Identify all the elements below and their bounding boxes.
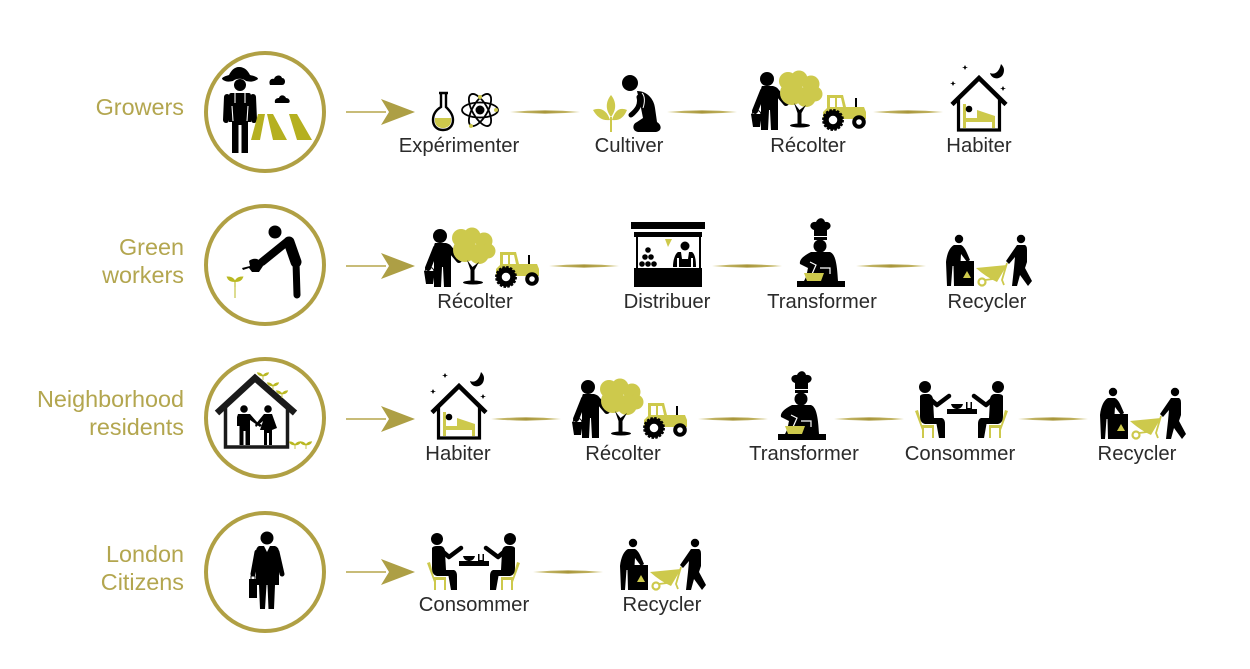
panel: London citizens row: [101, 513, 706, 631]
step: Récolter: Récolter: [770, 135, 846, 157]
step: Cultiver: [593, 75, 664, 157]
connector: [510, 110, 580, 114]
icon: worker watering a sprout in a circle: [206, 206, 324, 324]
step: Transformer: Transformer: [749, 443, 859, 465]
arrow: [346, 99, 415, 125]
step: Expérimenter: Expérimenter: [399, 135, 520, 157]
connector: [856, 264, 926, 268]
connector: [873, 110, 943, 114]
step: Récolter: [572, 378, 687, 465]
icon: couple in a house in a circle: [206, 359, 324, 477]
step: Consommer: [905, 381, 1015, 465]
connector: [533, 570, 603, 574]
step: Consommer: [419, 533, 529, 616]
heading: Neighborhood residents: residents: [89, 414, 184, 440]
step: Recycler: Recycler: [623, 594, 702, 616]
step: Recycler: [620, 539, 706, 616]
connector: [549, 264, 619, 268]
step: Récolter: [751, 70, 866, 157]
heading: Growers: Growers: [96, 94, 184, 120]
step: Habiter: [425, 372, 491, 465]
step: Récolter: Récolter: [437, 291, 513, 313]
connector: [698, 417, 768, 421]
heading: London Citizens: Citizens: [101, 569, 184, 595]
step: Transformer: Transformer: [767, 291, 877, 313]
panel: green workers row: [101, 206, 1032, 324]
step: Distribuer: Distribuer: [624, 291, 711, 313]
icon: businessman with briefcase in a circle: [206, 513, 324, 631]
heading: Green workers: Green: [119, 234, 184, 260]
arrow: [346, 559, 415, 585]
connector: [1018, 417, 1088, 421]
arrow: [346, 253, 415, 279]
step: Habiter: [946, 64, 1012, 157]
step: Recycler: [1098, 388, 1186, 465]
step: Expérimenter: [399, 91, 520, 157]
step: Habiter: Habiter: [425, 443, 491, 465]
connector: [667, 110, 737, 114]
arrow: [346, 406, 415, 432]
step: Recycler: [946, 235, 1032, 313]
heading: Green workers: workers: [101, 262, 184, 288]
step: Consommer: Consommer: [419, 594, 529, 616]
step: Habiter: Habiter: [946, 135, 1012, 157]
step: Recycler: Recycler: [1098, 443, 1177, 465]
connector: [491, 417, 561, 421]
step: Distribuer: [624, 222, 711, 313]
connector: [712, 264, 782, 268]
heading: London Citizens: London: [106, 541, 184, 567]
heading: Neighborhood residents: Neighborhood: [37, 386, 184, 412]
step: Transformer: [767, 218, 877, 313]
icon: farmer in a circle: [206, 53, 324, 171]
step: Recycler: Recycler: [948, 291, 1027, 313]
step: Transformer: [749, 371, 859, 465]
step: Cultiver: Cultiver: [595, 135, 664, 157]
panel: growers row: [96, 53, 1012, 171]
step: Récolter: Récolter: [585, 443, 661, 465]
step: Récolter: [424, 228, 539, 313]
panel: neighborhood residents row: [37, 359, 1186, 477]
step: Consommer: Consommer: [905, 443, 1015, 465]
connector: [834, 417, 904, 421]
